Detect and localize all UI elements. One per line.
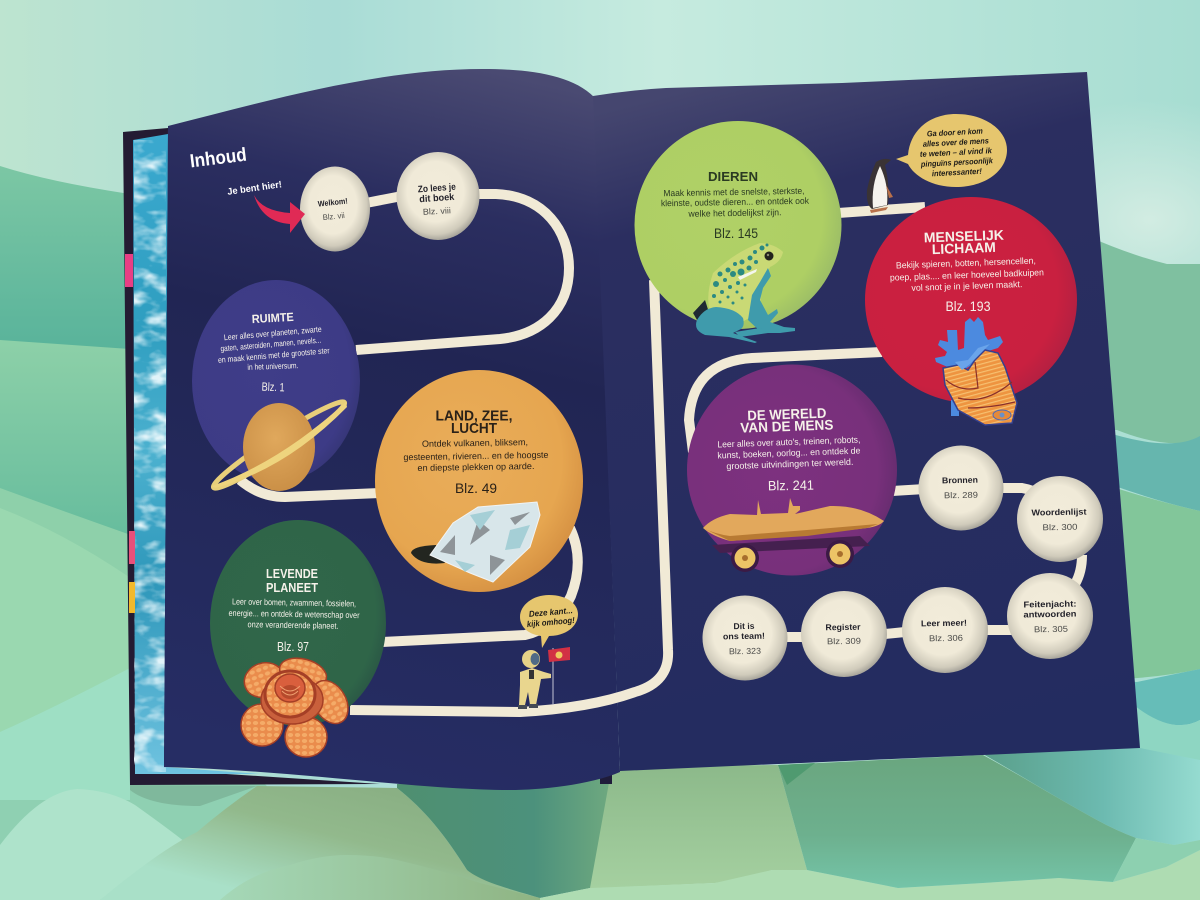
panel: Menselijk lichaam: vol snot je in je leven maakt. [911, 279, 1023, 293]
icon: Saturn [209, 395, 349, 495]
icon: astronaut with flag [518, 647, 570, 709]
panel: Menselijk lichaam: poep, plas.... en leer hoeveel badkuipen [890, 267, 1044, 283]
icon: rafflesia flower [239, 653, 355, 757]
panel: De wereld van de mens: Blz. 241 [768, 478, 814, 493]
speech bubble: Deze kant: kijk omhoog! [526, 615, 575, 629]
node: Woordenlijst: Woordenlijst [1031, 507, 1087, 517]
node: Bronnen: Bronnen [942, 475, 978, 485]
node: Leer meer: Leer meer! [921, 618, 967, 628]
panel: Levende planeet: LEVENDE [266, 566, 318, 581]
speech bubble: penguin [896, 114, 1007, 187]
node: Leer meer: Blz. 306 [929, 633, 963, 643]
panel: Land, zee, lucht [375, 370, 583, 592]
node: Leer meer [902, 587, 988, 673]
heading: Inhoud: Inhoud [189, 145, 248, 172]
panel: Menselijk lichaam: MENSELIJK [924, 227, 1004, 245]
node: Zo lees je dit boek: Zo lees je [417, 182, 456, 195]
panel: Menselijk lichaam: LICHAAM [932, 239, 996, 257]
panel: Land, zee, lucht: LUCHT [451, 420, 497, 437]
node: Feitenjacht: antwoorden [1023, 609, 1077, 619]
panel: Ruimte: Blz. 1 [261, 380, 285, 394]
panel: Dieren: Maak kennis met de snelste, sterkste, [663, 186, 805, 198]
panel: De wereld van de mens: DE WERELD [747, 405, 827, 423]
node: Zo lees je dit boek: Blz. viii [423, 205, 451, 217]
panel: Land, zee, lucht: en diepste plekken op aarde. [417, 461, 535, 473]
node: Feitenjacht [1007, 573, 1093, 659]
panel: Land, zee, lucht: Blz. 49 [455, 480, 497, 496]
panel: Land, zee, lucht: gesteenten, rivieren... en de hoogste [403, 450, 549, 462]
panel: Land, zee, lucht: Ontdek vulkanen, bliksem, [422, 437, 528, 449]
speech bubble: penguin: alles over de mens [923, 136, 990, 149]
node: Welkom: Welkom! [317, 196, 348, 209]
panel: Menselijk lichaam: Blz. 193 [946, 299, 990, 314]
panel: Levende planeet [210, 520, 386, 726]
speech bubble: Deze kant [520, 595, 578, 648]
node: Bronnen [918, 446, 1004, 530]
node: Dit is ons team: ons team! [723, 631, 765, 641]
panel: Ruimte: RUIMTE [251, 310, 294, 326]
panel: De wereld van de mens: kunst, boeken, oorlog... en ontdek de [717, 446, 861, 460]
icon: vintage car [703, 498, 884, 572]
speech bubble: Deze kant: Deze kant... [528, 605, 573, 619]
label: Je bent hier: Je bent hier! [227, 179, 283, 198]
icon: poison dart frog [693, 243, 795, 343]
node: Dit is ons team: Dit is [733, 621, 755, 631]
node: Register: Register [825, 622, 861, 632]
panel: Dieren [634, 121, 842, 329]
node: Register [801, 591, 887, 677]
node: Dit is ons team [702, 596, 788, 680]
book cover behind the pages [123, 128, 612, 785]
speech bubble: penguin: te weten – al vind ik [920, 146, 993, 159]
node: Feitenjacht: Feitenjacht: [1023, 599, 1077, 609]
node: Woordenlijst: Blz. 300 [1042, 522, 1078, 532]
route path [240, 194, 1082, 712]
panel: De wereld van de mens [687, 364, 897, 576]
node: Dit is ons team: Blz. 323 [729, 646, 761, 656]
panel: Ruimte: Leer alles over planeten, zwarte [224, 325, 322, 342]
speech bubble: penguin: pinguïns persoonlijk [920, 156, 994, 169]
panel: Levende planeet: PLANEET [266, 580, 318, 595]
node: Register: Blz. 309 [827, 636, 861, 646]
node: Zo lees je dit boek [396, 152, 480, 240]
icon: anatomical heart [935, 317, 1017, 425]
panel: De wereld van de mens: VAN DE MENS [740, 416, 834, 436]
panel: Dieren: welke het dodelijkst zijn. [687, 207, 782, 219]
panel: Menselijk lichaam [865, 197, 1077, 403]
speech bubble: penguin: interessanter! [932, 167, 982, 178]
icon: diamond [411, 502, 540, 582]
panel: Land, zee, lucht: LAND, ZEE, [436, 408, 512, 424]
node: Feitenjacht: Blz. 305 [1034, 624, 1068, 634]
panel: Levende planeet: energie... en ontdek de wetenschap over [228, 608, 360, 620]
panel: Dieren: kleinste, oudste dieren... en ontdek ook [661, 196, 809, 208]
node: Zo lees je dit boek: dit boek [419, 192, 455, 205]
panel: Ruimte [192, 280, 360, 482]
node: Bronnen: Blz. 289 [944, 490, 978, 500]
panel: Dieren: DIEREN [708, 169, 758, 184]
speech bubble: penguin: Ga door en kom [927, 127, 983, 138]
panel: Levende planeet: Blz. 97 [277, 639, 309, 654]
panel: Ruimte: gaten, asteroiden, manen, nevels... [220, 336, 321, 353]
left page [164, 69, 620, 790]
panel: Levende planeet: onze veranderende planeet. [247, 619, 339, 631]
node: Welkom: Blz. vii [322, 211, 345, 222]
panel: Ruimte: in het universum. [247, 361, 299, 372]
panel: De wereld van de mens: grootste uitvindingen ter wereld. [726, 457, 854, 471]
panel: Ruimte: en maak kennis met de grootste ster [218, 346, 330, 365]
icon: penguin [867, 159, 893, 213]
node: Woordenlijst [1017, 476, 1103, 562]
right page [593, 72, 1140, 771]
icon: red arrow [254, 195, 305, 233]
panel: Levende planeet: Leer over bomen, zwammen, fossielen, [232, 596, 356, 609]
panel: Dieren: Blz. 145 [714, 226, 758, 241]
panel: Menselijk lichaam: Bekijk spieren, botten, hersencellen, [896, 256, 1036, 270]
panel: De wereld van de mens: Leer alles over auto's, treinen, robots, [717, 435, 861, 449]
node: Welkom [300, 166, 370, 252]
